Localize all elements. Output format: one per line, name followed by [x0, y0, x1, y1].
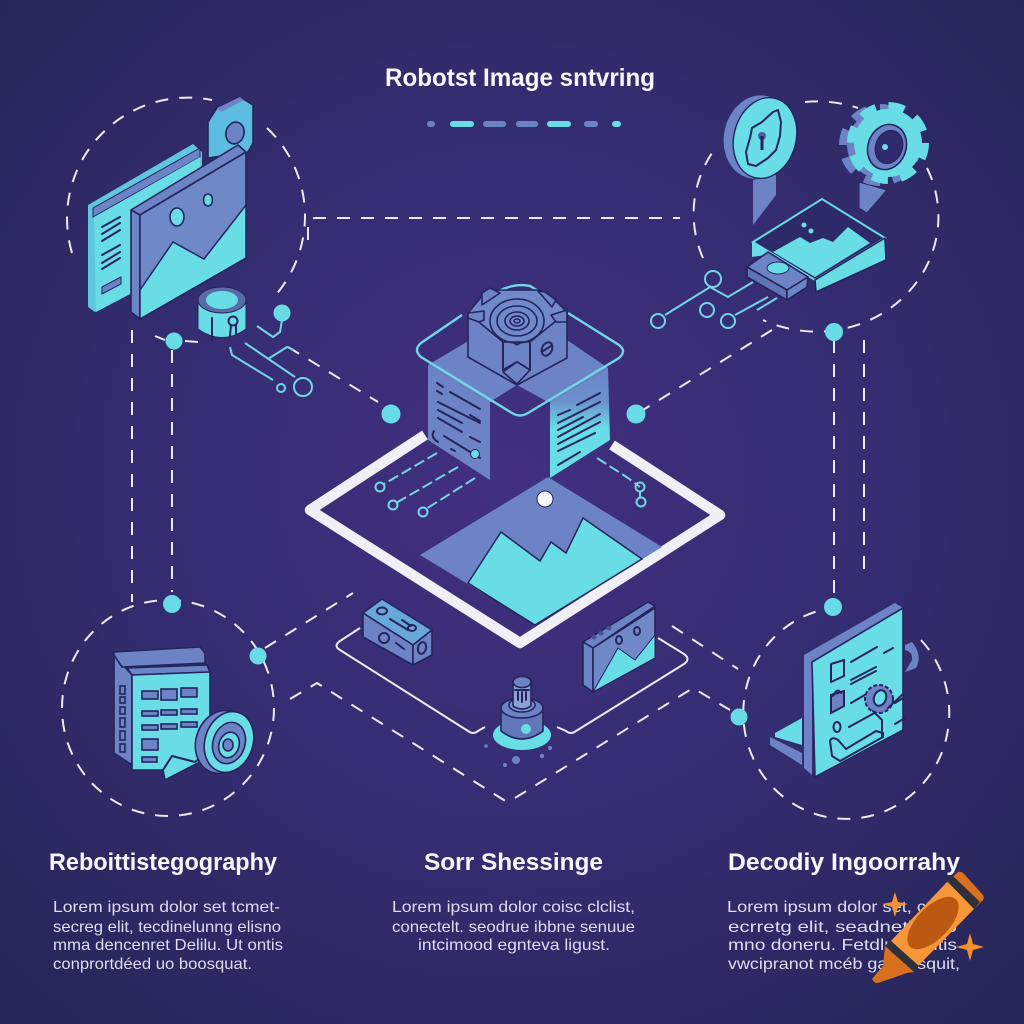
body: Lorem ipsum dolor set tcmet- [53, 899, 280, 916]
keyhole pin [716, 89, 806, 225]
body [727, 899, 960, 973]
icon: top-right pin, gear and image box [651, 89, 924, 328]
icon: bottom-right document board [770, 603, 919, 777]
central gear camera [468, 288, 567, 385]
connector nodes [163, 304, 843, 726]
gear [843, 106, 924, 213]
body [53, 899, 283, 973]
central white frame [310, 435, 720, 643]
tag [208, 97, 253, 158]
lock cylinder [198, 287, 246, 340]
body: conprortdéed uo boosquat. [53, 956, 252, 973]
right page [550, 368, 610, 478]
body: ecrretg elit, seadnetiimno [728, 919, 957, 936]
circuit lines [651, 271, 777, 328]
body: mma dencenret Delilu. Ut ontis [53, 937, 283, 954]
title divider dashes [427, 121, 621, 127]
body: conectelt. seodrue ibbne senuue [392, 919, 635, 936]
heading: Sorr Shessinge [424, 849, 603, 876]
icon: lens device [484, 676, 552, 767]
central image with mountains [420, 477, 662, 625]
heading: Reboittistegography [49, 849, 277, 876]
icon: orange crayon with sparkles [872, 872, 984, 983]
centre opening [493, 385, 548, 416]
rounded outline [417, 285, 623, 416]
circuit lines [230, 320, 312, 396]
icon: small box [363, 599, 432, 665]
body: intcimood egnteva ligust. [418, 937, 610, 954]
icon: top-left image panels [88, 97, 312, 396]
body [392, 899, 635, 954]
dashed connectors [62, 98, 949, 819]
central stacked pages [376, 285, 646, 516]
connector device [747, 252, 808, 300]
body: vwcipranot mcéb gat bosquit, [728, 956, 960, 973]
column: right text [727, 849, 960, 973]
top face [428, 340, 608, 402]
body: mno doneru. Fetdlum ontis [728, 937, 957, 954]
column: centre text [392, 849, 635, 954]
icon: bottom-left document and disk [114, 647, 261, 780]
front image panel [131, 145, 246, 319]
page pin lines [376, 453, 646, 516]
title: Robotst Image sntvring [385, 64, 655, 92]
body: secreg elit, tecdinelunng elisno [53, 919, 281, 936]
column: left text [49, 849, 283, 973]
back panel [88, 144, 202, 312]
heading: Decodiy Ingoorrahy [728, 849, 960, 876]
body: Lorem ipsum dolor set, cr [727, 899, 933, 916]
body: Lorem ipsum dolor coisc clclist, [392, 899, 635, 916]
left page [428, 365, 490, 480]
icon: small window [583, 602, 655, 692]
image box [752, 199, 886, 292]
